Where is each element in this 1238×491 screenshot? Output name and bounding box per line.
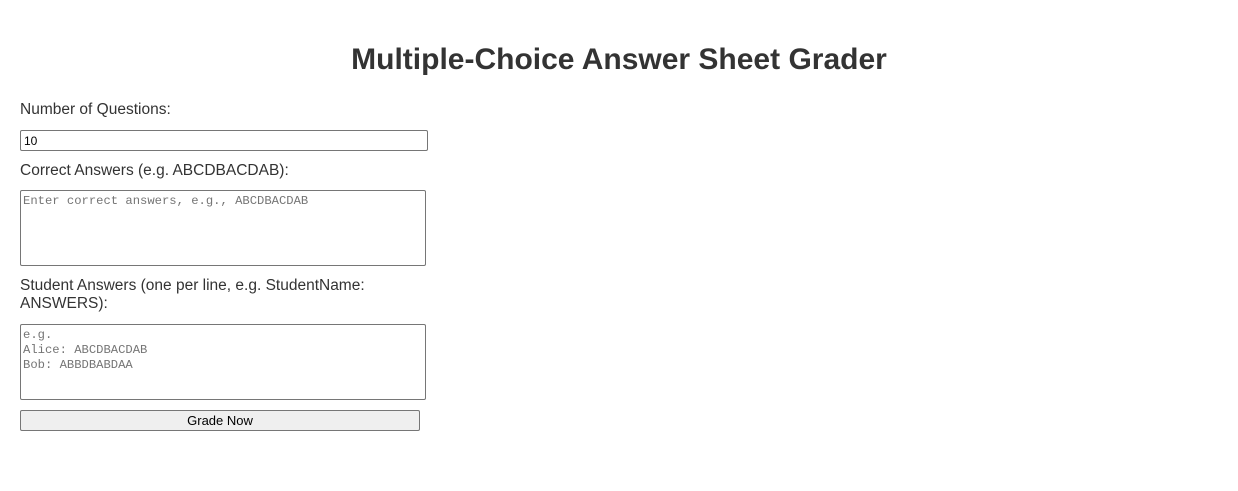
button: grade now [20, 410, 420, 431]
input: number [20, 130, 428, 151]
title: Multiple-Choice Answer Sheet Grader [351, 43, 887, 76]
label: number of questions: Number of Questions: [20, 101, 171, 118]
textarea: correct answers [20, 190, 426, 266]
input: number: 10 [24, 134, 37, 148]
textarea: correct answers: Enter correct answers, e.g., ABCDBACDAB [23, 194, 308, 208]
button: grade now: Grade Now [187, 413, 253, 428]
label: correct answers: Correct Answers (e.g. ABCDBACDAB): [20, 162, 289, 179]
label: student answers: Student Answers (one per line, e.g. StudentName: ANSWERS): [20, 277, 365, 312]
textarea: student answers: e.g. [23, 328, 52, 342]
textarea: student answers [20, 324, 426, 400]
textarea: student answers: Bob: ABBDBABDAA [23, 358, 133, 372]
textarea: student answers: Alice: ABCDBACDAB [23, 343, 147, 357]
